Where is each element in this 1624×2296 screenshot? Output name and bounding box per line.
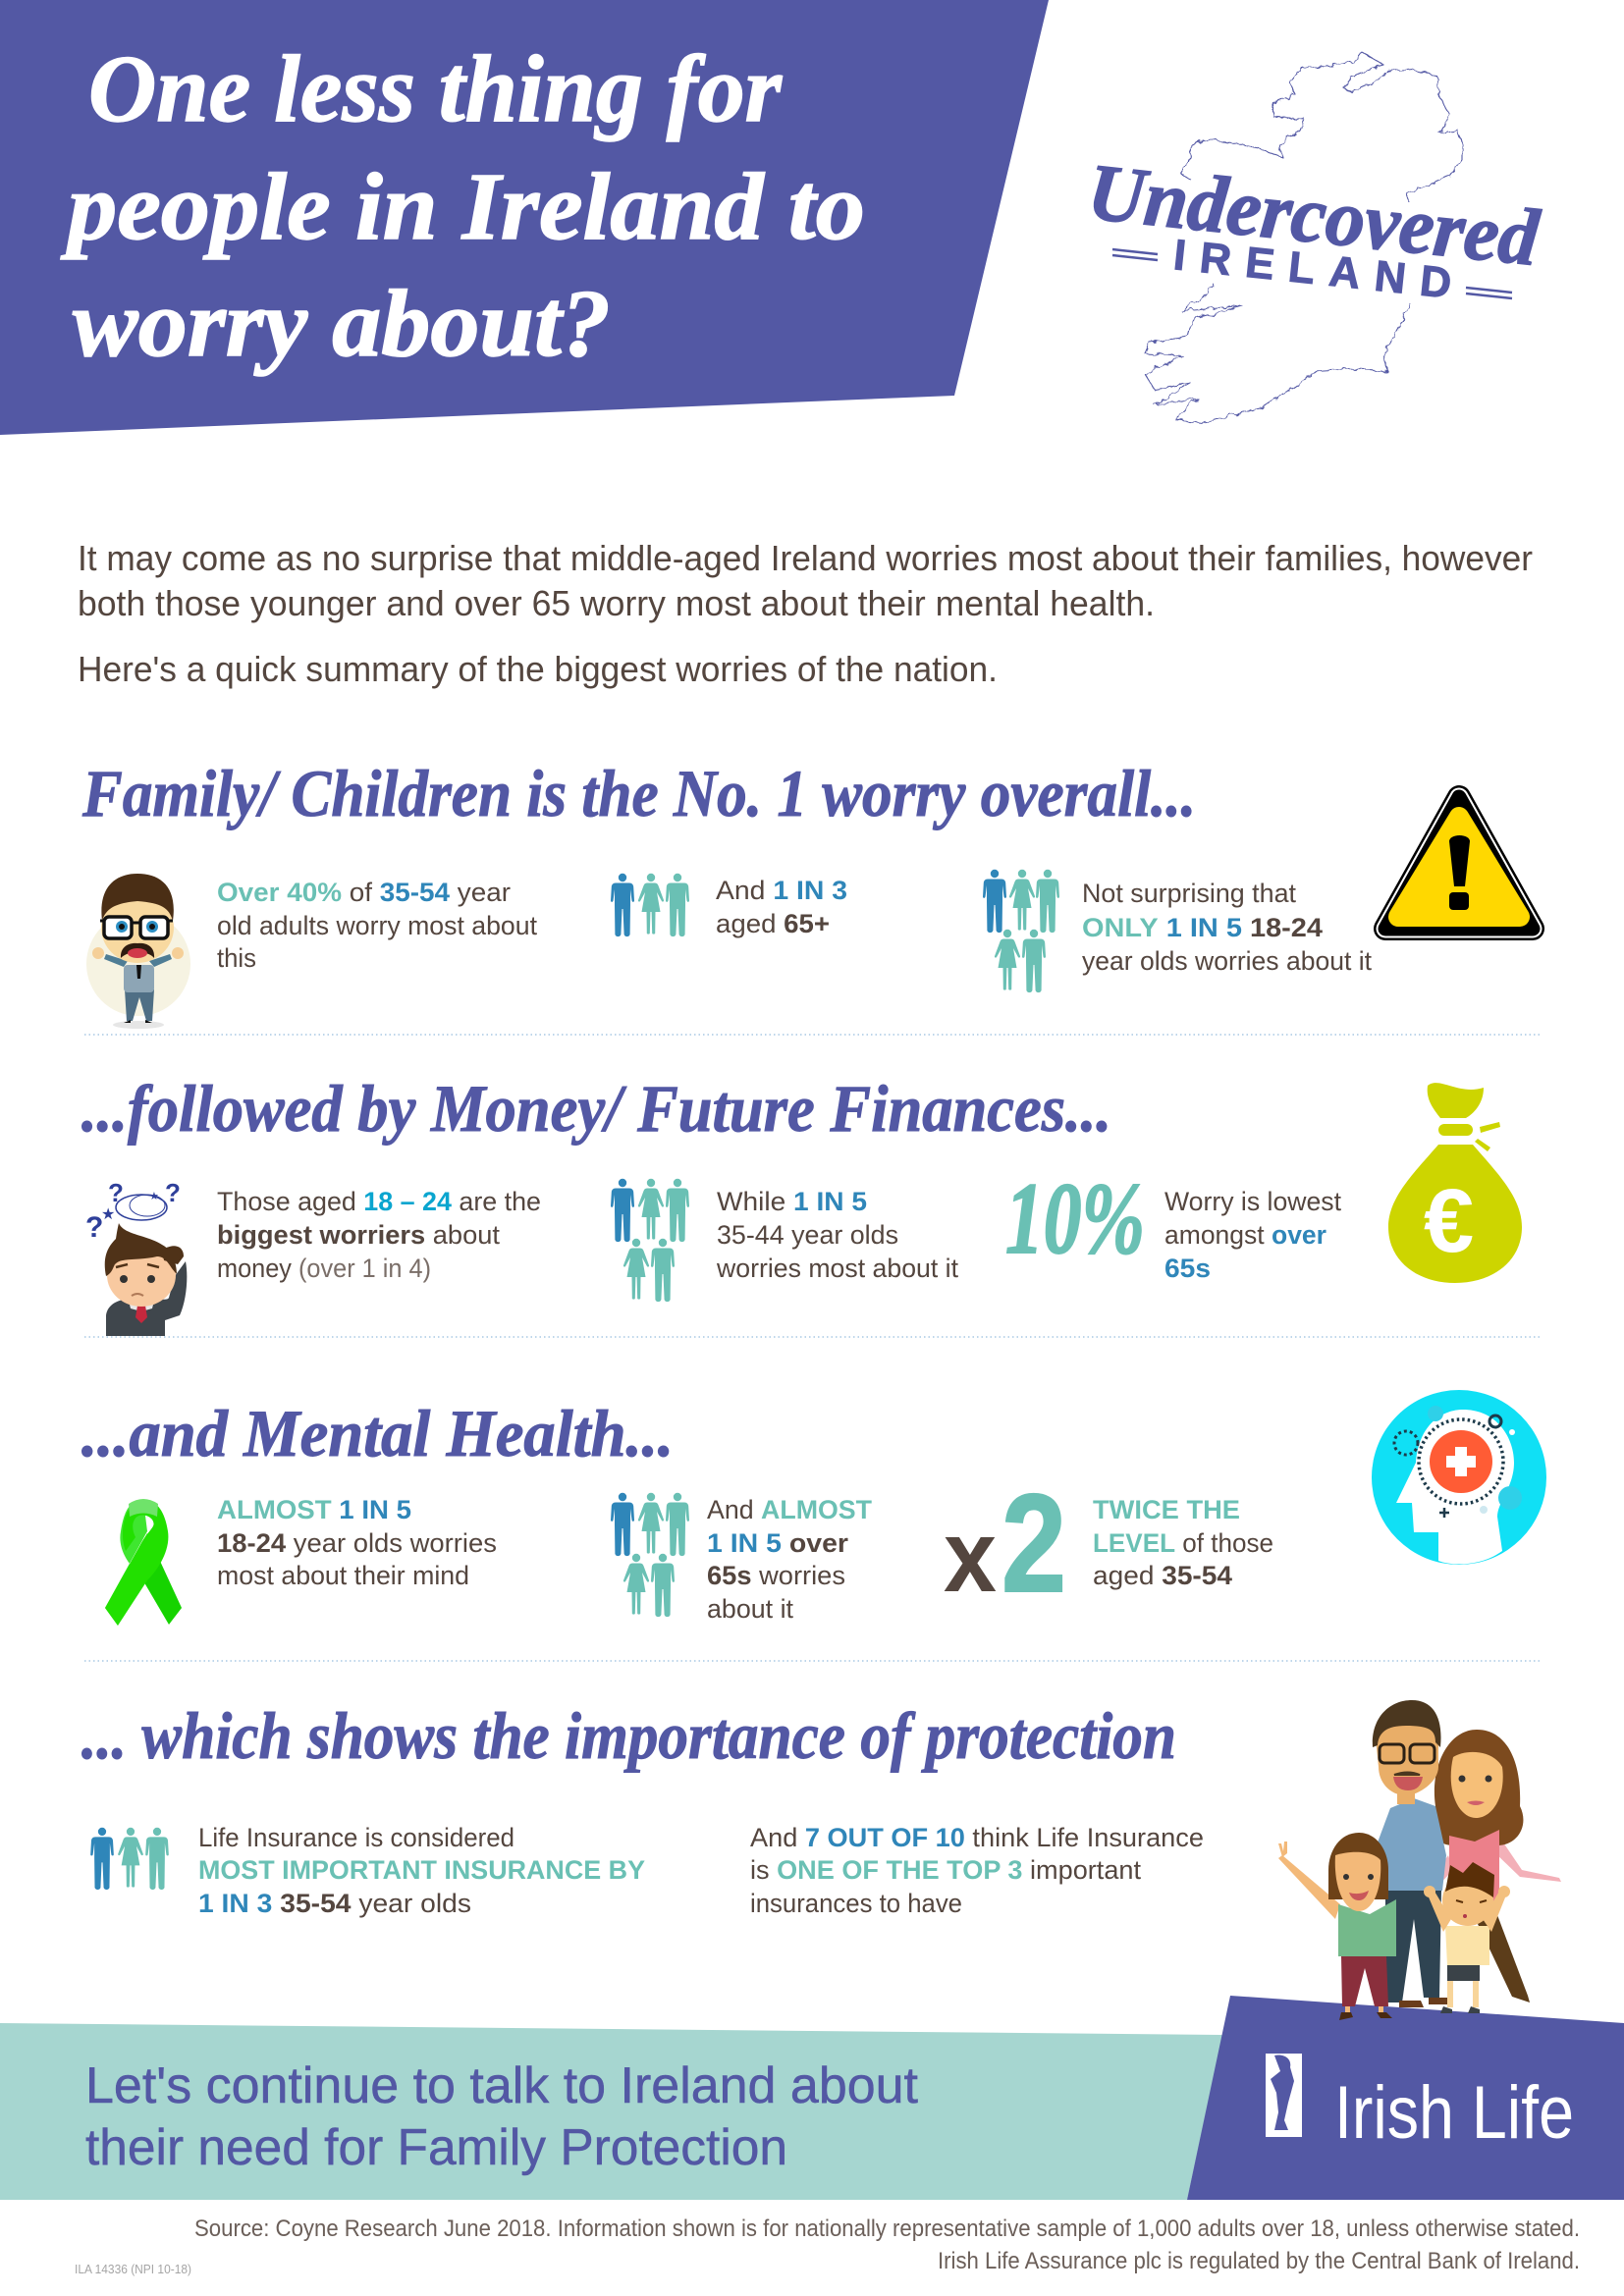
- icon: money bag: €: [1424, 1171, 1474, 1271]
- text: and almost 1 in 5: And ALMOST: [707, 1495, 872, 1524]
- map outline of Ireland: [1145, 52, 1462, 423]
- heading: family: Family/ Children is the No. 1 worry overall...: [81, 756, 1196, 830]
- icon: warning triangle: [1385, 797, 1533, 929]
- icon: green ribbon: [105, 1499, 182, 1626]
- icon: confused man: ?: [85, 1211, 103, 1244]
- stat: x2: 2: [1001, 1466, 1066, 1622]
- icon: people 1 in 5: [983, 870, 1059, 992]
- source note: Irish Life Assurance plc is regulated by the Central Bank of Ireland.: [938, 2248, 1580, 2274]
- header banner: [0, 0, 1049, 435]
- text: life insurance: MOST IMPORTANT INSURANCE BY: [198, 1855, 645, 1885]
- illustration: family: [1278, 1700, 1561, 2020]
- mother: [1424, 1730, 1561, 2002]
- text: 1 in 3 aged 65+: [716, 876, 847, 938]
- text: life insurance: [198, 1823, 645, 1918]
- panel: mental health: [81, 1390, 1546, 1626]
- text: 7 out of 10: insurances to have: [750, 1889, 962, 1918]
- text: and almost 1 in 5: 1 IN 5 over: [707, 1528, 849, 1558]
- title: [61, 36, 865, 377]
- text: life insurance: Life Insurance is considered: [198, 1823, 514, 1852]
- stat: x2: [944, 1466, 1066, 1622]
- logo: Irish Life: [1266, 2054, 1574, 2155]
- footer call to action: Let's continue to talk to Ireland about: [85, 2057, 919, 2114]
- text: 7 out of 10: is ONE OF THE TOP 3 important: [750, 1855, 1141, 1885]
- text: twice the level: LEVEL of those: [1093, 1528, 1273, 1558]
- icon: confused man: [85, 1178, 187, 1336]
- heading: protection: ... which shows the importance of protection: [81, 1698, 1176, 1773]
- father: [1373, 1700, 1453, 2007]
- text: 1 in 3 aged 65+: aged 65+: [716, 909, 830, 938]
- text: those aged 18-24: biggest worriers about: [217, 1220, 500, 1250]
- boy: [1424, 1862, 1510, 2013]
- source note: [194, 2216, 1580, 2274]
- text: only 1 in 5: year olds worries about it: [1082, 946, 1372, 976]
- logo: Irish Life: Irish Life: [1334, 2071, 1574, 2155]
- icon: money bag: [1388, 1083, 1522, 1283]
- panel: protection: [81, 1698, 1204, 1918]
- wordmark: Ireland: IRELAND: [1171, 231, 1454, 308]
- icon: head with medical cross: [1372, 1390, 1546, 1565]
- text: while 1 in 5: While 1 IN 5: [717, 1187, 867, 1216]
- girl: [1278, 1833, 1396, 2020]
- intro text: Here's a quick summary of the biggest worries of the nation.: [78, 649, 998, 689]
- text: while 1 in 5: 35-44 year olds: [717, 1220, 898, 1250]
- icon: confused man: ★: [149, 1191, 159, 1202]
- text: almost 1 in 5: [217, 1495, 497, 1590]
- text: while 1 in 5: worries most about it: [716, 1254, 958, 1283]
- text: while 1 in 5: [716, 1187, 958, 1283]
- text: only 1 in 5: ONLY 1 IN 5 18-24: [1082, 913, 1323, 942]
- wordmark rules: [1112, 249, 1512, 298]
- title: worry about?: [73, 271, 611, 377]
- footer call to action: [85, 2057, 919, 2176]
- logo: Undercovered Ireland map: [1084, 52, 1543, 423]
- text: this: this: [217, 943, 256, 973]
- text: and almost 1 in 5: 65s worries: [707, 1561, 845, 1590]
- text: twice the level: TWICE THE: [1093, 1495, 1240, 1524]
- intro text: both those younger and over 65 worry most about their mental health.: [78, 583, 1155, 623]
- text: twice the level: [1093, 1495, 1273, 1590]
- reference code: ILA 14336 (NPI 10-18): [75, 2262, 191, 2276]
- icon: people 1 in 3: [611, 874, 689, 936]
- text: only 1 in 5: Not surprising that: [1082, 879, 1296, 908]
- divider: [84, 1034, 1541, 1036]
- divider: [84, 1660, 1541, 1662]
- text: almost 1 in 5: ALMOST 1 IN 5: [217, 1495, 411, 1524]
- text: worry is lowest: amongst over: [1164, 1220, 1326, 1250]
- text: worry is lowest: Worry is lowest: [1164, 1187, 1341, 1216]
- title: One less thing for: [88, 36, 783, 142]
- panel: family and children: [81, 756, 1533, 1029]
- text: almost 1 in 5: most about their mind: [217, 1561, 469, 1590]
- intro text: [78, 538, 1533, 689]
- text: twice the level: aged 35-54: [1093, 1561, 1232, 1590]
- icon: confused man: ★: [101, 1206, 115, 1223]
- intro text: It may come as no surprise that middle-aged Ireland worries most about their families, however: [78, 538, 1533, 578]
- footer band: [0, 2023, 1222, 2200]
- stat: 10 percent: 10%: [1005, 1162, 1145, 1275]
- text: and almost 1 in 5: [707, 1495, 872, 1624]
- panel: money and future finances: [81, 1071, 1522, 1336]
- text: only 1 in 5: [1082, 879, 1372, 976]
- heading: money: ...followed by Money/ Future Finances...: [81, 1071, 1111, 1146]
- text: 7 out of 10: [750, 1823, 1204, 1918]
- footer logo panel: [1187, 1996, 1624, 2200]
- text: life insurance: 1 IN 3 35-54 year olds: [198, 1889, 471, 1918]
- icon: confused man: ?: [165, 1178, 181, 1207]
- text: 7 out of 10: And 7 OUT OF 10 think Life Insurance: [750, 1823, 1204, 1852]
- heading: mental health: ...and Mental Health...: [81, 1396, 674, 1470]
- text: worry is lowest: [1164, 1187, 1341, 1283]
- footer call to action: their need for Family Protection: [85, 2119, 787, 2176]
- text: over 40 percent: Over 40% of 35-54 year: [217, 878, 511, 907]
- icon: people 1 in 3: [90, 1828, 169, 1890]
- text: almost 1 in 5: 18-24 year olds worries: [217, 1528, 497, 1558]
- text: worry is lowest: 65s: [1164, 1254, 1211, 1283]
- text: those aged 18-24: money (over 1 in 4): [217, 1254, 431, 1283]
- text: those aged 18-24: [217, 1187, 541, 1283]
- title: people in Ireland to: [61, 154, 865, 260]
- divider: [84, 1336, 1541, 1338]
- icon: people 1 in 5: [611, 1493, 689, 1617]
- text: those aged 18-24: Those aged 18 – 24 are the: [217, 1187, 541, 1216]
- text: old adults: old adults worry most about: [217, 911, 537, 940]
- stat: x2: x: [944, 1500, 997, 1614]
- icon: people 1 in 5: [611, 1179, 689, 1302]
- text: 1 in 3 aged 65+: And 1 IN 3: [716, 876, 847, 905]
- text: and almost 1 in 5: about it: [707, 1594, 793, 1624]
- icon: worried man: [86, 874, 190, 1029]
- icon: confused man: ?: [108, 1178, 124, 1207]
- wordmark: Undercovered: Undercovered: [1084, 146, 1543, 283]
